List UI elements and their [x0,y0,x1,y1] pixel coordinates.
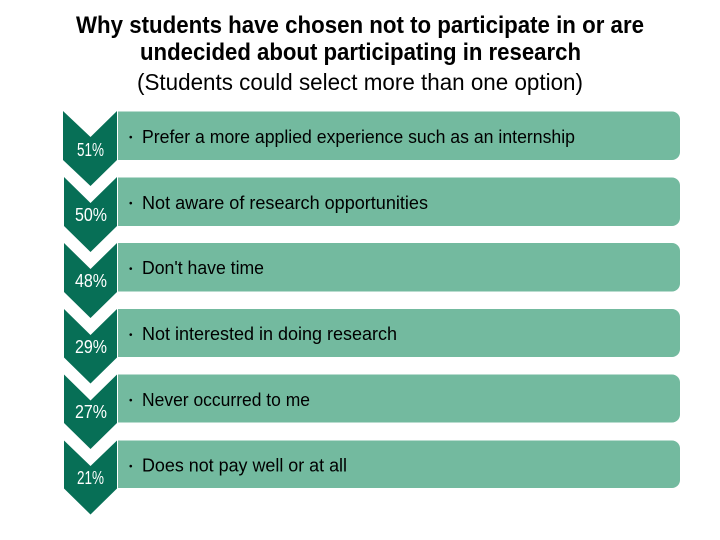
row: 50% not aware: 50% [75,205,107,225]
row: 21% pay: • [129,462,133,472]
row: 51% prefer applied experience: • [129,133,133,144]
row: 48% no time: Don't have time [142,257,264,278]
row: 27% never occurred: 27% [75,402,107,422]
title: undecided about participating in research [140,39,581,66]
row: 29% not interested: 29% [75,337,107,357]
row: 51% prefer applied experience: Prefer a more applied experience such as an internship [142,126,575,147]
row: 29% not interested: • [129,330,133,341]
row: 27% never occurred: Never occurred to me [142,389,310,410]
row: 29% not interested: Not interested in doing research [142,323,397,344]
title: (Students could select more than one option) [137,69,583,95]
row: 29% not interested [64,309,680,384]
row: 50% not aware: Not aware of research opportunities [142,192,428,213]
row: 27% never occurred: • [129,396,133,406]
row: 27% never occurred [64,374,680,449]
row: 48% no time [64,243,680,318]
row: 51% prefer applied experience [63,111,680,186]
row: 21% pay: 21% [77,468,104,488]
title [76,12,644,95]
row: 21% pay [64,440,680,514]
row: 21% pay: Does not pay well or at all [142,454,347,476]
row: 48% no time: 48% [75,271,107,291]
row: 51% prefer applied experience: 51% [77,140,104,160]
title: Why students have chosen not to participate in or are [76,12,644,39]
row: 50% not aware: • [129,198,133,210]
row: 48% no time: • [129,264,133,275]
row: 50% not aware [64,177,680,252]
